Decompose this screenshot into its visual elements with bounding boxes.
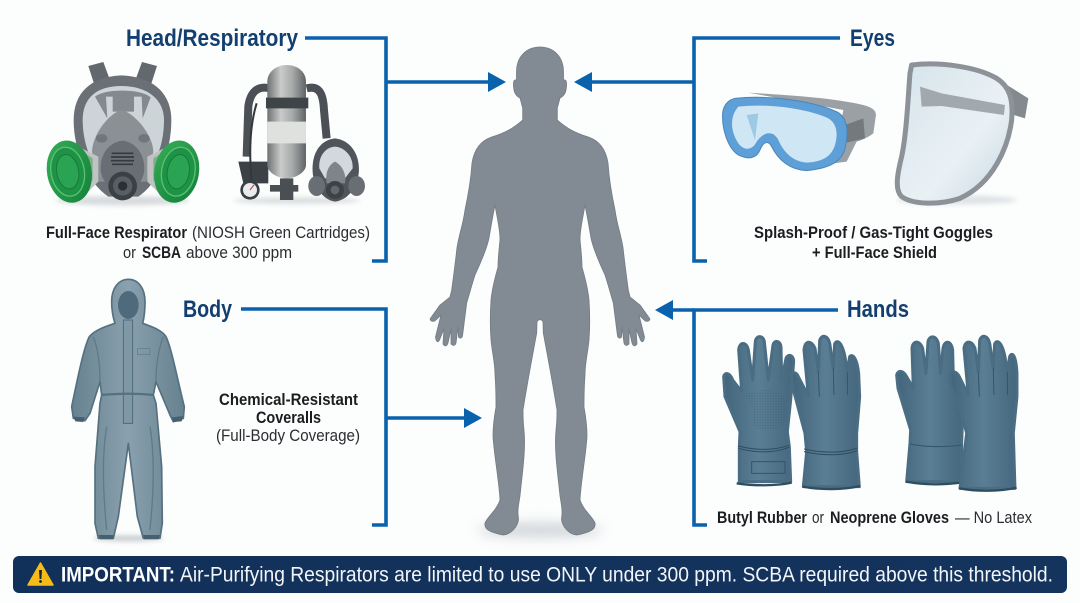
panel: head/respiratory bbox=[42, 25, 506, 262]
icon: warning triangle bbox=[28, 563, 53, 585]
panel: eyes bbox=[574, 25, 1028, 262]
heading: eyes: Eyes bbox=[850, 25, 895, 52]
description: body: Chemical-Resistant bbox=[219, 390, 358, 409]
description: body: Coveralls bbox=[256, 408, 321, 427]
icon: butyl rubber gloves bbox=[724, 336, 860, 489]
heading: body: Body bbox=[183, 296, 233, 323]
banner text: IMPORTANT: bbox=[61, 564, 175, 586]
description: hands: Neoprene Gloves bbox=[830, 508, 949, 527]
body silhouette bbox=[430, 47, 650, 537]
description: head/respiratory bbox=[46, 223, 370, 262]
description: head/respiratory: above 300 ppm bbox=[186, 243, 292, 262]
heading: hands: Hands bbox=[847, 296, 909, 323]
connector: body to silhouette bbox=[241, 309, 482, 525]
description: eyes bbox=[754, 223, 993, 262]
panel: body bbox=[72, 279, 482, 542]
icon: full-face shield bbox=[897, 64, 1028, 205]
description: head/respiratory: Full-Face Respirator bbox=[46, 223, 187, 242]
icon: chemical-resistant coverall bbox=[72, 279, 184, 542]
description: head/respiratory: SCBA bbox=[142, 243, 181, 262]
description: body bbox=[216, 390, 360, 445]
panel: hands bbox=[655, 296, 1032, 527]
description: hands: — No Latex bbox=[955, 508, 1032, 527]
connector: hands to silhouette bbox=[655, 300, 838, 525]
description: head/respiratory: (NIOSH Green Cartridges) bbox=[192, 223, 370, 242]
connector: head to body bbox=[305, 38, 506, 261]
icon: neoprene gloves bbox=[897, 336, 1017, 491]
description: hands: Butyl Rubber bbox=[717, 508, 807, 527]
description: eyes: Splash-Proof / Gas-Tight Goggles bbox=[754, 223, 993, 242]
description: hands: or bbox=[812, 508, 824, 527]
description: body: (Full-Body Coverage) bbox=[216, 426, 360, 445]
icon: full-face respirator bbox=[42, 62, 204, 206]
description: head/respiratory: or bbox=[123, 243, 136, 262]
heading: head/respiratory: Head/Respiratory bbox=[126, 25, 299, 52]
warning banner bbox=[13, 556, 1067, 593]
connector: eyes to body bbox=[574, 38, 840, 261]
description: eyes: + Full-Face Shield bbox=[812, 243, 937, 262]
icon: SCBA air tank with mask bbox=[233, 65, 365, 204]
icon: goggles bbox=[723, 93, 876, 171]
description: hands bbox=[717, 508, 1032, 527]
